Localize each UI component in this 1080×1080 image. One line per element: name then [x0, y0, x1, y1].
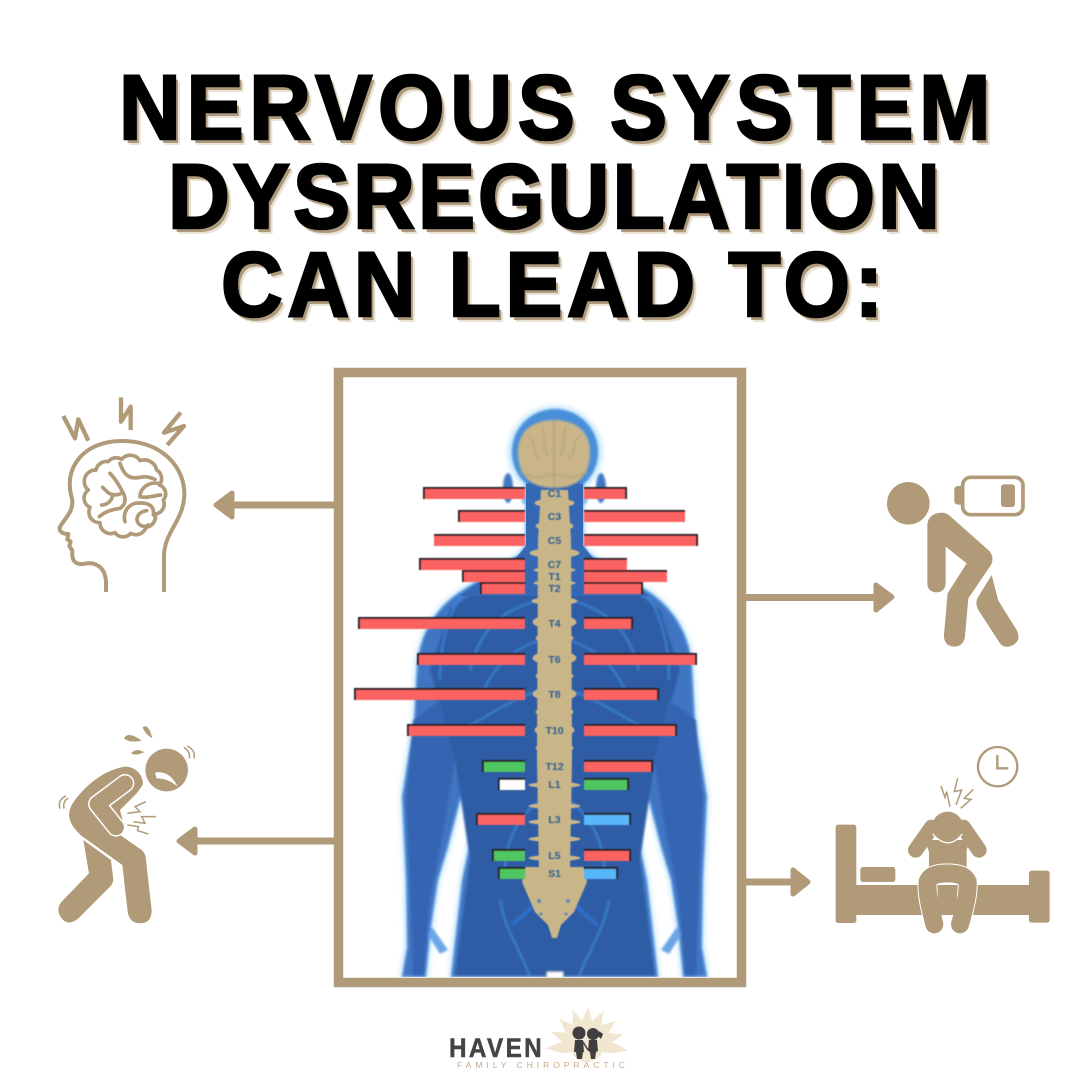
vertebra labels: T1 [548, 571, 561, 583]
icon: person awake on bed with clock [836, 747, 1050, 924]
title: NERVOUS SYSTEM [119, 56, 990, 159]
icon: person bent with back pain [58, 726, 194, 923]
vertebra labels: L3 [548, 814, 561, 826]
icon: head with brain and lightning [60, 397, 184, 592]
vertebra labels: C7 [548, 559, 561, 571]
logo: Haven Family Chiropractic [449, 1007, 629, 1070]
vertebra labels: T12 [545, 761, 564, 773]
vertebra labels: L1 [548, 779, 561, 791]
vertebra labels: T6 [548, 654, 561, 666]
brain in head [518, 420, 590, 488]
arrow: frame to brain icon [216, 493, 334, 517]
spine [522, 490, 587, 938]
icon: tired person with low battery [887, 477, 1023, 647]
logo sun [545, 1007, 629, 1062]
neck [459, 484, 650, 596]
title: NERVOUS SYSTEM [124, 62, 995, 165]
title [119, 56, 995, 342]
vertebra labels [545, 488, 564, 880]
frame [338, 372, 742, 982]
vertebra labels: C5 [548, 535, 561, 547]
vertebra labels: T2 [548, 583, 561, 595]
vertebra labels: T10 [545, 725, 564, 737]
body illustration [403, 409, 706, 978]
vertebra labels: L5 [548, 850, 561, 862]
arrow: frame to pain icon [179, 829, 334, 853]
title: NERVOUS SYSTEM [122, 60, 993, 163]
arrow: frame to insomnia icon [746, 870, 808, 894]
vertebra labels: S1 [548, 868, 561, 880]
vertebra labels: C3 [548, 511, 561, 523]
panel: spine chart [338, 372, 742, 982]
title: CAN LEAD TO: [226, 239, 888, 342]
title: DYSREGULATION [168, 145, 940, 248]
vertebra labels: T8 [548, 689, 561, 701]
logo tagline: FAMILY CHIROPRACTIC [457, 1060, 625, 1070]
arrow: frame to fatigue icon [746, 585, 892, 610]
title: DYSREGULATION [173, 151, 945, 254]
title: CAN LEAD TO: [224, 237, 886, 340]
left and right bars [354, 487, 698, 879]
logo children silhouettes [572, 1026, 603, 1059]
vertebra labels: T4 [548, 618, 561, 630]
vertebra labels: C1 [548, 488, 561, 500]
title: DYSREGULATION [171, 149, 943, 252]
title: CAN LEAD TO: [221, 233, 883, 336]
logo wordmark: HAVEN [449, 1034, 542, 1063]
